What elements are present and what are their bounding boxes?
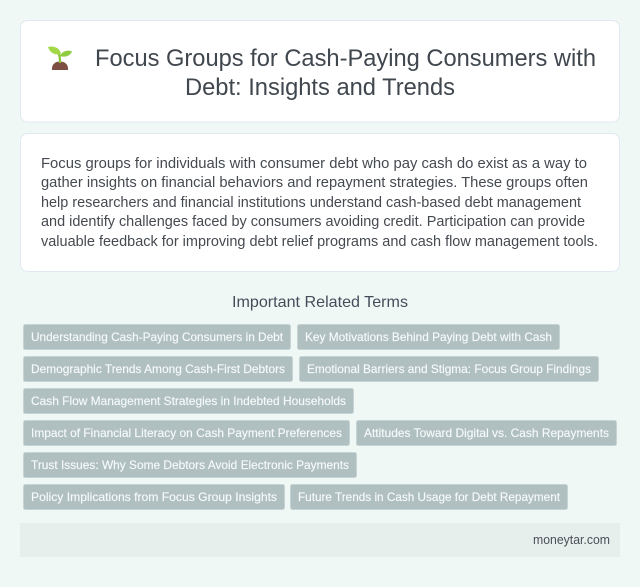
- text block: description: Focus groups for individuals with consumer debt who pay cash do exist as a way to: [41, 156, 587, 172]
- chip: demographics: Demographic Trends Among Cash-First Debtors: [31, 362, 285, 376]
- footer: moneytar.com: [533, 533, 610, 547]
- chip: motivations: [298, 324, 560, 350]
- text block: description: valuable feedback for improving debt relief programs and cash flow management tools.: [41, 234, 598, 250]
- chip: future trends: Future Trends in Cash Usage for Debt Repayment: [298, 490, 561, 504]
- chip: emotional barriers: [300, 356, 598, 382]
- icon: seedling: [48, 47, 72, 70]
- chip: cash flow: Cash Flow Management Strategies in Indebted Households: [31, 394, 346, 408]
- text block: description: gather insights on financial behaviors and repayment strategies. These groups often: [41, 175, 588, 191]
- footer: [20, 523, 620, 557]
- chip: financial literacy: [24, 420, 350, 446]
- chip: demographics: [24, 356, 292, 382]
- chip: understanding: [24, 324, 290, 350]
- panel: description card: [20, 134, 620, 272]
- text block: description: [41, 156, 598, 250]
- chip: trust issues: Trust Issues: Why Some Debtors Avoid Electronic Payments: [31, 458, 349, 472]
- chip: trust issues: [24, 452, 356, 478]
- title: Focus Groups for Cash-Paying Consumers with: [95, 45, 596, 72]
- chip: attitudes: Attitudes Toward Digital vs. Cash Repayments: [364, 426, 609, 440]
- term chips: [24, 324, 616, 510]
- chip: understanding: Understanding Cash-Paying Consumers in Debt: [31, 330, 284, 344]
- chip: attitudes: [356, 420, 616, 446]
- text block: description: and identify challenges faced by consumers avoiding credit. Participation can provide: [41, 214, 585, 230]
- chip: emotional barriers: Emotional Barriers and Stigma: Focus Group Findings: [307, 362, 591, 376]
- heading: related terms: Important Related Terms: [232, 294, 408, 311]
- chip: motivations: Key Motivations Behind Paying Debt with Cash: [305, 330, 552, 344]
- chip: policy: [24, 484, 284, 510]
- title: [95, 45, 596, 101]
- panel: title card: [20, 20, 620, 122]
- chip: cash flow: [24, 388, 354, 414]
- chip: policy: Policy Implications from Focus Group Insights: [31, 490, 277, 504]
- chip: future trends: [290, 484, 568, 510]
- text block: description: help researchers and financial institutions understand cash-based debt management: [41, 195, 581, 211]
- chip: financial literacy: Impact of Financial Literacy on Cash Payment Preferences: [31, 426, 342, 440]
- title: Debt: Insights and Trends: [185, 74, 455, 101]
